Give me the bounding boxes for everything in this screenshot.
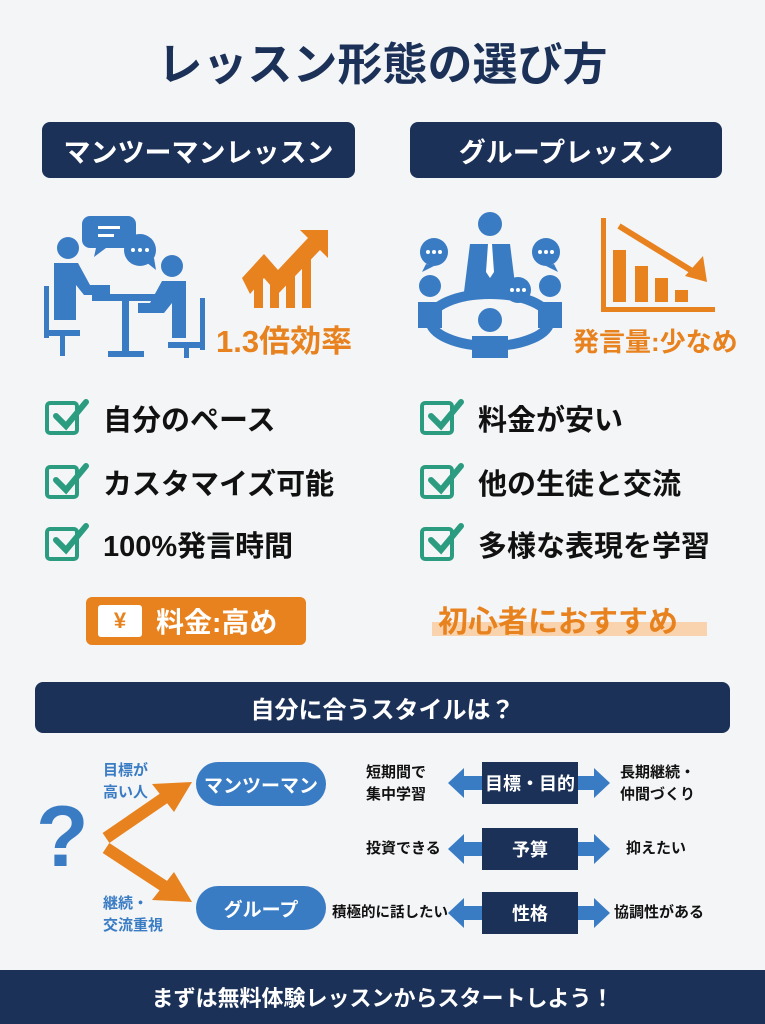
header: group: [410, 122, 722, 178]
list: group merits: [420, 401, 710, 563]
icon: group meeting: [418, 212, 562, 358]
pill: group: グループ: [224, 900, 298, 920]
icon: one-to-one meeting: [44, 216, 205, 358]
label: high goals: [103, 762, 148, 801]
price tag: high: [86, 597, 306, 645]
header: one-to-one: [42, 122, 355, 178]
stat: efficiency: 1.3倍効率: [216, 324, 352, 359]
row: goals: 集中学習: [366, 786, 426, 803]
row: goals: 目標・目的: [485, 774, 575, 794]
item: [420, 465, 681, 501]
icon: declining chart: [601, 218, 715, 312]
question mark: ?: [36, 789, 89, 885]
header: group: グループレッスン: [459, 138, 673, 168]
row: goals: 長期継続・: [620, 764, 695, 781]
pill: one-to-one: マンツーマン: [204, 776, 318, 796]
row: budget: 予算: [512, 840, 548, 860]
item: [45, 527, 293, 563]
label: continuity: 継続・: [103, 895, 148, 912]
row: personality: 協調性がある: [614, 904, 704, 921]
row: goals: [366, 762, 695, 804]
row: goals: 仲間づくり: [620, 786, 695, 803]
row: goals: 短期間で: [366, 764, 426, 781]
recommendation: 初心者におすすめ: [438, 606, 678, 639]
item: 多様な表現を学習: [478, 531, 710, 563]
title: レッスン形態の選び方: [157, 39, 608, 90]
icon: growth chart: [242, 230, 328, 308]
row: budget: 投資できる: [366, 840, 441, 857]
item: 自分のペース: [103, 405, 276, 437]
footer CTA: まずは無料体験レッスンからスタートしよう！: [151, 986, 614, 1011]
header: one-to-one: マンツーマンレッスン: [64, 138, 334, 168]
label: high goals: 高い人: [103, 784, 148, 801]
item: 100%発言時間: [103, 531, 293, 563]
row: personality: 積極的に話したい: [332, 905, 448, 921]
banner: question: [35, 682, 730, 733]
arrows: branch: [102, 782, 192, 902]
footer CTA: [0, 970, 765, 1024]
comparison rows: [332, 762, 704, 934]
item: 他の生徒と交流: [478, 469, 681, 501]
list: one-to-one merits: [45, 401, 334, 563]
row: personality: [332, 892, 704, 934]
row: personality: 性格: [512, 904, 548, 924]
price tag: high: ¥: [114, 608, 126, 633]
banner: question: 自分に合うスタイルは？: [250, 697, 514, 724]
item: [420, 401, 623, 437]
pill: group: [196, 886, 326, 930]
price tag: high: 料金:高め: [156, 607, 277, 638]
stat: speaking time: 発言量:少なめ: [573, 327, 738, 357]
row: budget: 抑えたい: [626, 840, 686, 857]
label: continuity: 交流重視: [103, 917, 163, 934]
label: continuity: [103, 895, 163, 934]
item: カスタマイズ可能: [103, 469, 334, 501]
row: budget: [366, 828, 686, 870]
checkmarks: [53, 399, 464, 554]
label: high goals: 目標が: [103, 762, 148, 779]
pill: one-to-one: [196, 762, 326, 806]
item: [45, 401, 276, 437]
item: 料金が安い: [478, 405, 623, 437]
